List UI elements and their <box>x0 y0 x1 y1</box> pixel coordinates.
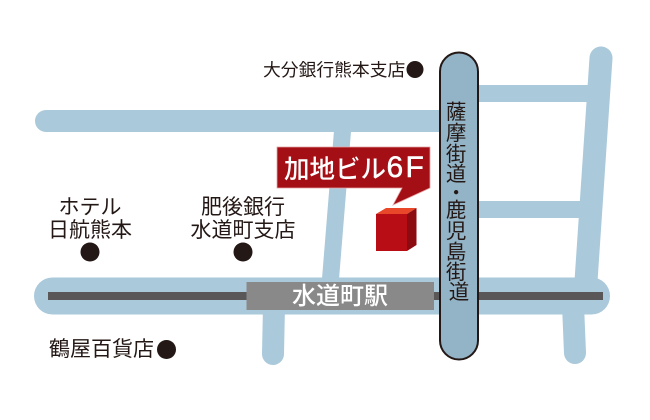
station: 水道町駅: 水道町駅 <box>292 283 388 310</box>
callout: 加地ビル6F: 6 <box>386 151 403 184</box>
road label: 薩摩街道・鹿児島街道: 摩 <box>446 122 466 145</box>
landmark: 大分銀行熊本支店: 大分銀行熊本支店 <box>263 60 405 80</box>
landmark: 肥後銀行水道町支店: 肥後銀行 <box>201 196 285 219</box>
callout: 加地ビル6F: F <box>406 151 424 184</box>
landmark: 肥後銀行水道町支店: 水道町支店 <box>190 219 296 242</box>
road label: 薩摩街道・鹿児島街道: 街 <box>446 143 466 166</box>
landmark: 鶴屋百貨店: 鶴屋百貨店 <box>49 338 154 361</box>
station: 水道町駅 <box>246 282 434 310</box>
road label: 薩摩街道・鹿児島街道: 道 <box>449 281 469 304</box>
callout: 加地ビル6F: 加地ビル <box>284 156 386 184</box>
road label: 薩摩街道・鹿児島街道: 道 <box>446 163 466 186</box>
landmark: ホテル日航熊本: ホテル <box>58 196 122 219</box>
road label: 薩摩街道・鹿児島街道: 薩 <box>446 101 466 124</box>
road label: 薩摩街道・鹿児島街道: 街 <box>446 261 466 284</box>
landmark: ホテル日航熊本 <box>48 196 132 262</box>
road label: 薩摩街道・鹿児島街道 <box>440 52 478 360</box>
road label: 薩摩街道・鹿児島街道: ・ <box>446 182 466 205</box>
landmark: ホテル日航熊本: 日航熊本 <box>48 219 132 242</box>
landmark: 肥後銀行水道町支店 <box>190 196 296 262</box>
icon: red building cube <box>376 208 416 251</box>
road label: 薩摩街道・鹿児島街道: 児 <box>446 220 466 243</box>
road label: 薩摩街道・鹿児島街道: 鹿 <box>446 199 466 222</box>
road label: 薩摩街道・鹿児島街道: 島 <box>446 241 466 264</box>
railway line <box>48 292 603 300</box>
roads <box>46 58 601 354</box>
callout: 加地ビル6F <box>277 147 430 205</box>
